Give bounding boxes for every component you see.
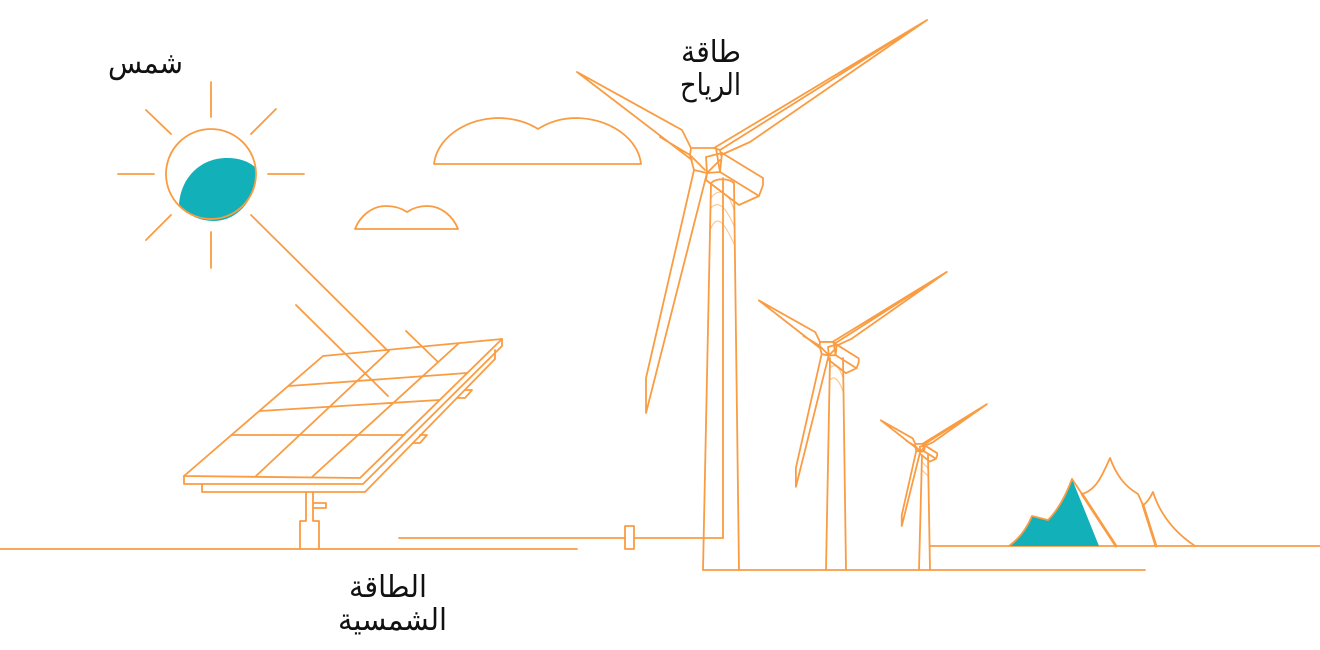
wind label line 2: الرياح [680,68,741,103]
large cloud [434,118,641,164]
base line [703,569,1145,571]
title: sun label: شمس [108,46,183,81]
large wind turbine [577,20,927,570]
sun ray to panel [251,215,388,351]
connector cable [399,526,723,549]
wind label: طاقة [681,35,741,70]
ground right [930,545,1320,547]
mountains [1009,458,1195,546]
medium wind turbine [759,272,947,570]
solar label: الطاقة [349,570,427,605]
ground left [0,548,577,550]
solar panel [184,305,502,549]
small cloud [355,206,458,229]
small wind turbine [881,404,987,570]
icon: sun [118,82,304,268]
solar label line 2: الشمسية [338,603,447,638]
